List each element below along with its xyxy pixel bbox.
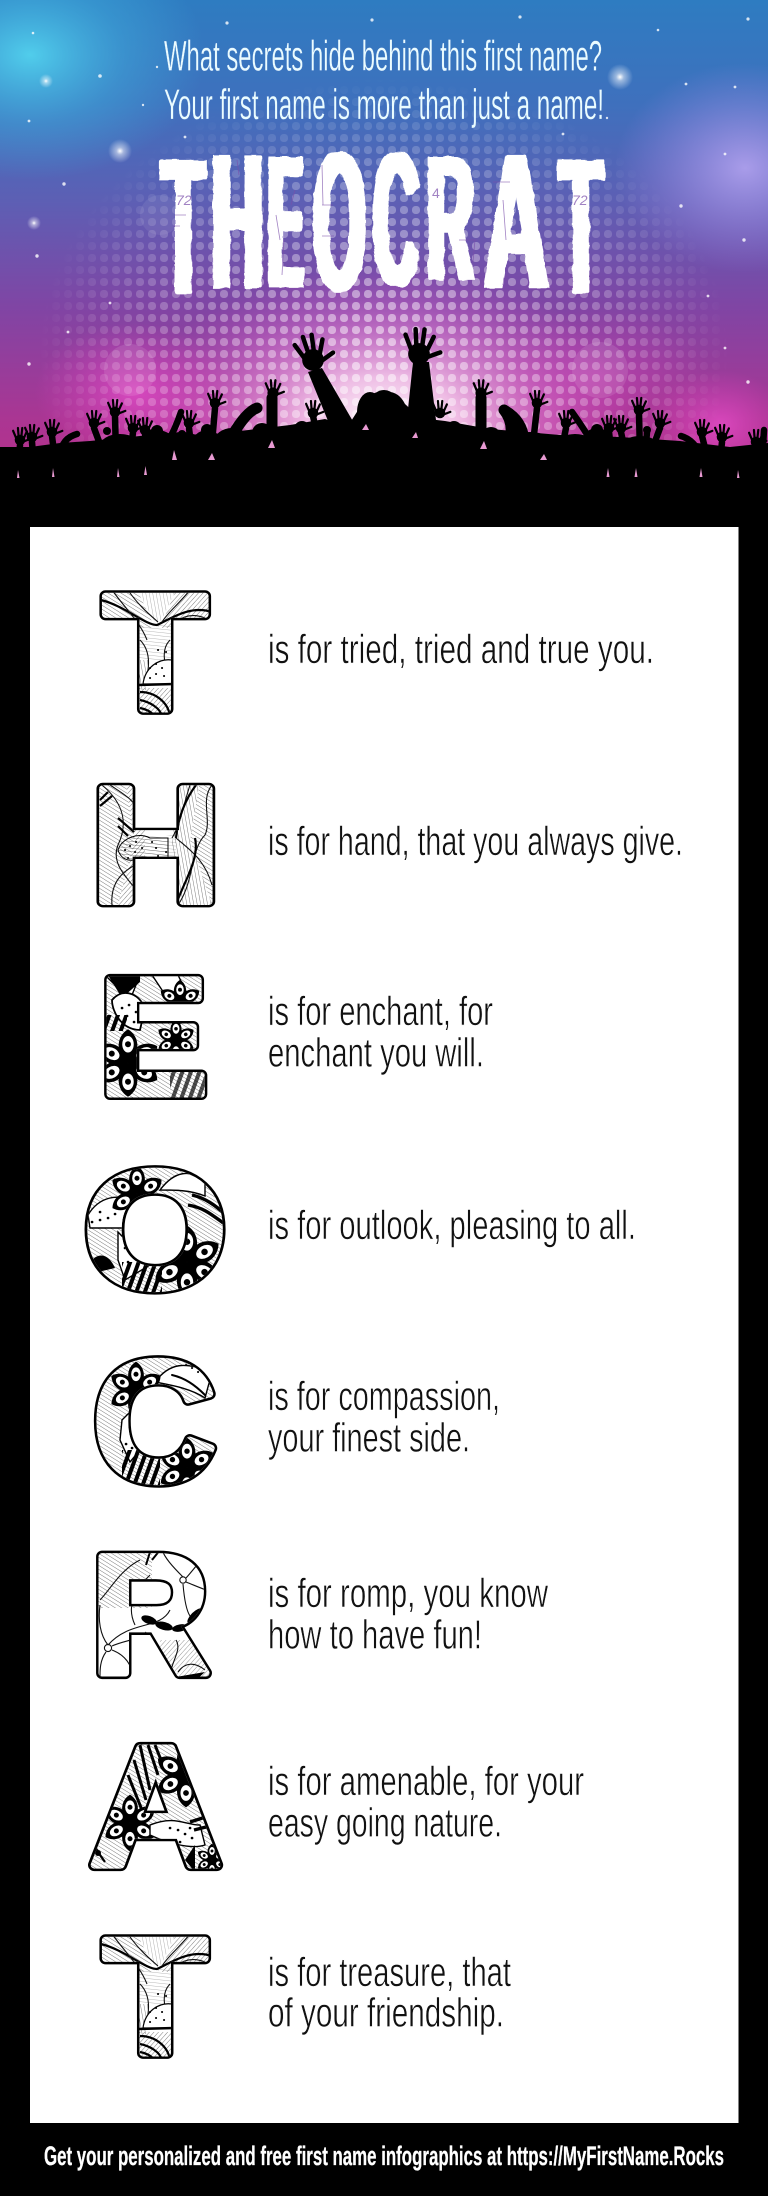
icon: letter R — [96, 1550, 212, 1680]
icon: letter R: R — [91, 1521, 209, 1710]
heading: tagline — [164, 32, 604, 129]
row: C compassion — [94, 1355, 498, 1488]
icon: letter T second — [99, 1934, 212, 2059]
gaps in crowd — [17, 424, 740, 478]
title: THEOCRAT: O — [313, 110, 365, 334]
text: E meaning — [268, 988, 493, 1076]
title: THEOCRAT: R — [427, 117, 474, 320]
icon: letter O: O — [84, 1137, 227, 1323]
icon: letter T second: T — [104, 1905, 207, 2088]
icon: letter T — [99, 590, 212, 715]
icon: letter A — [88, 1742, 224, 1872]
icon: letter C: C — [93, 1327, 216, 1517]
icon: letter C — [94, 1355, 218, 1488]
icon: letter H: H — [91, 754, 221, 937]
panel: letters and meanings — [30, 527, 738, 2123]
title: THEOCRAT: A — [484, 113, 548, 331]
row: H hand — [96, 782, 680, 908]
icon: letter T: T — [104, 561, 207, 744]
text: A meaning: easy going nature. — [268, 1800, 502, 1846]
icon: letter H — [96, 782, 216, 908]
text: E meaning: is for enchant, for — [268, 988, 493, 1034]
text: R meaning: is for romp, you know — [268, 1570, 548, 1616]
icon: letter E: E — [99, 944, 208, 1129]
row: R romp — [96, 1550, 548, 1680]
text: R meaning — [268, 1570, 548, 1658]
icon: letter E — [104, 974, 208, 1100]
title: THEOCRAT: H — [212, 113, 263, 332]
title scratches: 72 — [176, 192, 192, 208]
icon: letter E: E — [99, 944, 208, 1129]
title scratches — [173, 160, 588, 275]
row: E enchant — [104, 974, 492, 1100]
text: C meaning — [268, 1373, 500, 1460]
title scratches: 72 — [572, 192, 588, 208]
icon: letter H: H — [91, 754, 221, 937]
icon: letter O — [84, 1165, 226, 1295]
text: T second meaning — [268, 1949, 511, 2036]
title: THEOCRAT: T — [163, 118, 204, 337]
text: T second meaning: is for treasure, that — [268, 1949, 511, 1995]
panel: concert hero background — [0, 0, 768, 447]
title: THEOCRAT: T — [560, 118, 602, 337]
text: C meaning: is for compassion, — [268, 1373, 500, 1419]
text: T second meaning: of your friendship. — [268, 1990, 504, 2036]
title: THEOCRAT: E — [268, 115, 303, 329]
row: A amenable — [88, 1742, 584, 1872]
icon: letter T second: T — [104, 1905, 207, 2088]
icon: letter T: T — [104, 561, 207, 744]
crowd silhouette — [0, 329, 768, 530]
text: C meaning: your finest side. — [268, 1414, 470, 1460]
text: E meaning: enchant you will. — [268, 1030, 484, 1076]
title: THEOCRAT — [163, 110, 602, 337]
row: T tried — [99, 590, 652, 715]
stars and sparkles — [27, 15, 750, 384]
text: A meaning — [268, 1758, 584, 1846]
title: THEOCRAT: C — [373, 114, 419, 327]
text: A meaning: is for amenable, for your — [268, 1758, 584, 1804]
icon: letter A: A — [90, 1712, 221, 1902]
icon: letter O: O — [84, 1137, 227, 1323]
row: O outlook — [84, 1165, 634, 1295]
title scratches: 4 — [432, 185, 440, 201]
text: R meaning: how to have fun! — [268, 1612, 482, 1658]
icon: letter C: C — [93, 1327, 216, 1517]
icon: letter R: R — [91, 1521, 209, 1710]
icon: letter A: A — [90, 1712, 221, 1902]
row: T treasure — [99, 1934, 511, 2059]
